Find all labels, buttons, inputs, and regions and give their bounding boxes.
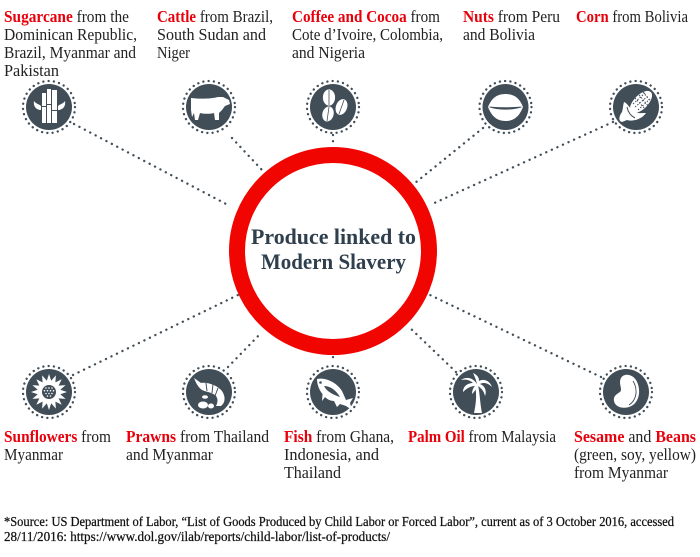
- label: prawns: and Myanmar: [126, 445, 213, 464]
- label: prawns: [126, 427, 270, 464]
- label: fish: Fish from Ghana,: [284, 427, 394, 446]
- label: cattle: Niger: [157, 43, 190, 62]
- label: sesame and beans: from Myanmar: [574, 463, 668, 482]
- central title: Produce linked to: [251, 224, 416, 249]
- label: palm oil: Palm Oil from Malaysia: [408, 427, 557, 446]
- label: sunflowers: Myanmar: [4, 445, 63, 464]
- label: nuts: Nuts from Peru: [463, 7, 560, 26]
- icon: prawn: [183, 366, 235, 418]
- label: sugarcane: Dominican Republic,: [4, 25, 137, 44]
- label: cattle: Cattle from Brazil,: [157, 7, 273, 26]
- icon: coffee beans: [307, 81, 359, 133]
- icon: sunflower: [23, 366, 75, 418]
- label: coffee and cocoa: Coffee and Cocoa from: [292, 7, 440, 26]
- label: nuts: [463, 7, 560, 44]
- central title: Modern Slavery: [261, 249, 407, 274]
- labels: bottom row: [4, 427, 697, 482]
- label: sesame and beans: [574, 427, 697, 482]
- label: coffee and cocoa: and Nigeria: [292, 43, 366, 62]
- label: sesame and beans: Sesame and Beans: [574, 427, 697, 446]
- label: sunflowers: [4, 427, 111, 464]
- label: sugarcane: Pakistan: [4, 61, 59, 80]
- label: cattle: South Sudan and: [157, 25, 267, 44]
- icon: cattle: [183, 81, 235, 133]
- label: fish: Indonesia, and: [284, 445, 380, 464]
- label: coffee and cocoa: Cote d’Ivoire, Colombia,: [292, 25, 443, 44]
- icon: nut: [480, 81, 532, 133]
- central title: [251, 224, 416, 274]
- labels: top row: [4, 7, 689, 80]
- label: fish: Thailand: [284, 463, 342, 482]
- source footnote: 28/11/2016: https://www.dol.gov/ilab/reports/child-labor/list-of-products/: [4, 529, 390, 544]
- label: corn: Corn from Bolivia: [576, 7, 689, 26]
- label: sunflowers: Sunflowers from: [4, 427, 111, 446]
- label: fish: [284, 427, 394, 482]
- label: coffee and cocoa: [292, 7, 443, 62]
- label: sugarcane: Sugarcane from the: [4, 7, 129, 26]
- icon: corn: [610, 81, 662, 133]
- label: sugarcane: [4, 7, 137, 80]
- label: sugarcane: Brazil, Myanmar and: [4, 43, 137, 62]
- label: nuts: and Bolivia: [463, 25, 536, 44]
- icon: sugarcane: [23, 81, 75, 133]
- icon: fish: [307, 366, 359, 418]
- connector lines: [73, 122, 613, 377]
- icon: bean: [600, 366, 652, 418]
- source footnote: [4, 514, 674, 544]
- icon: palm tree: [450, 366, 502, 418]
- label: prawns: Prawns from Thailand: [126, 427, 270, 446]
- label: cattle: [157, 7, 273, 62]
- central ring: [237, 155, 429, 347]
